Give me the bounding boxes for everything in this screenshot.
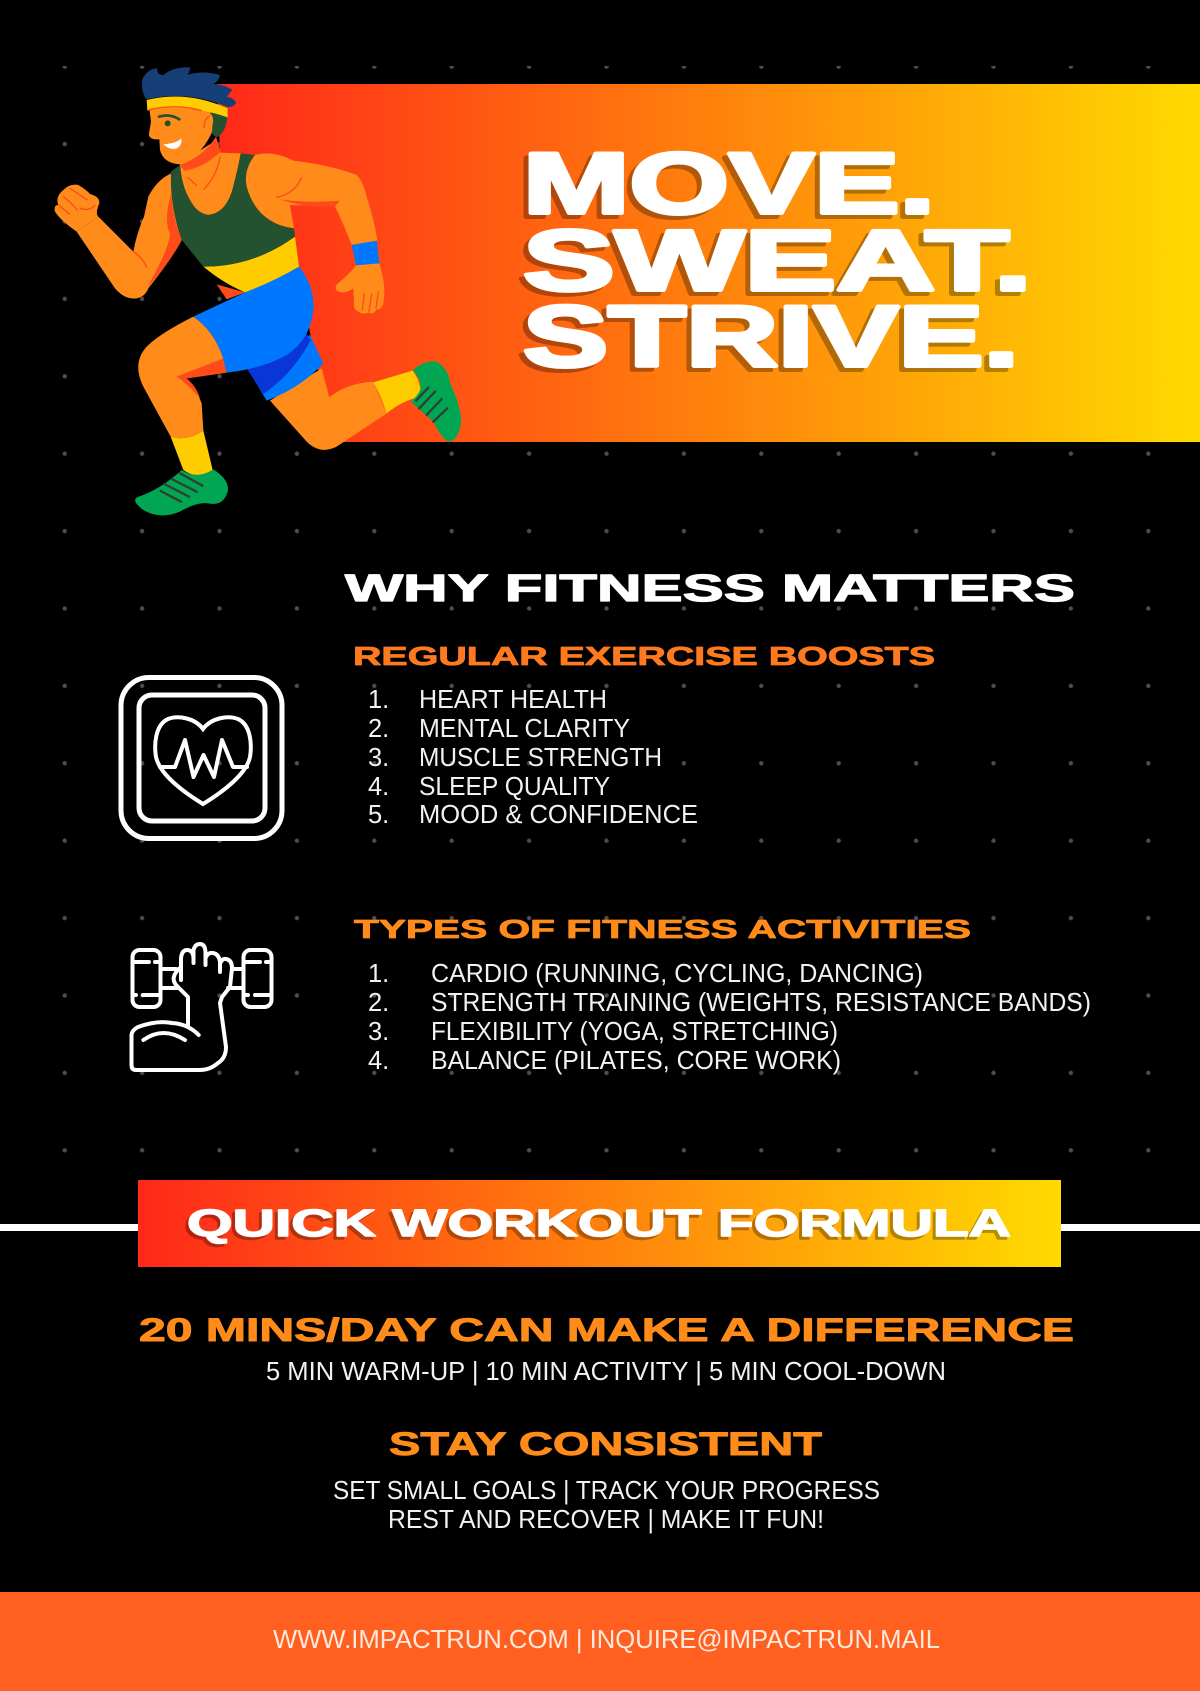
fist: [55, 185, 99, 232]
list: exercise benefits: HEART HEALTH: [419, 686, 607, 714]
list: exercise benefits: 2.: [368, 715, 389, 743]
hero gradient banner: [217, 84, 1200, 442]
list: exercise benefits: SLEEP QUALITY: [419, 773, 610, 801]
headband: [147, 96, 228, 117]
banner: quick workout formula: QUICK WORKOUT FORMULA: [187, 1203, 1011, 1245]
front shoe: [135, 469, 228, 515]
icon: hand with dumbbell: [132, 944, 272, 1070]
list: activity types: 3.: [368, 1018, 389, 1046]
list: activity types: FLEXIBILITY (YOGA, STRETCHING): [431, 1018, 838, 1046]
list: activity types: 2.: [368, 989, 389, 1017]
list: exercise benefits: 1.: [368, 686, 389, 714]
title: move sweat strive: SWEAT.: [523, 213, 1032, 309]
text: consistency tips: REST AND RECOVER | MAKE IT FUN!: [388, 1506, 824, 1534]
tank top: [171, 153, 295, 267]
list: exercise benefits: 3.: [368, 744, 389, 772]
front sock: [171, 431, 213, 475]
list: activity types: BALANCE (PILATES, CORE WORK): [431, 1047, 841, 1075]
title: move sweat strive: MOVE.: [523, 136, 935, 232]
list: exercise benefits: [368, 686, 698, 829]
open hand: [336, 263, 384, 314]
heading: stay consistent: STAY CONSISTENT: [389, 1426, 823, 1462]
wristband: [352, 241, 379, 265]
list: exercise benefits: MOOD & CONFIDENCE: [419, 801, 698, 829]
heading: why fitness matters: WHY FITNESS MATTERS: [345, 568, 1075, 610]
text: consistency tips: SET SMALL GOALS | TRACK YOUR PROGRESS: [333, 1477, 880, 1505]
text: consistency tips: [333, 1477, 880, 1534]
title: move sweat strive: [523, 136, 1032, 385]
face: [149, 103, 215, 164]
heading: 20 mins a day: 20 MINS/DAY CAN MAKE A DIFFERENCE: [139, 1312, 1074, 1348]
subheading: types of fitness activities: TYPES OF FITNESS ACTIVITIES: [354, 914, 971, 944]
waist shadow: [217, 284, 245, 299]
banner: quick workout formula: [138, 1180, 1061, 1267]
title: move sweat strive: STRIVE.: [523, 289, 1019, 385]
list: exercise benefits: 5.: [368, 801, 389, 829]
front arm: [77, 173, 182, 299]
shorts rear leg: [247, 333, 323, 401]
list: exercise benefits: MUSCLE STRENGTH: [419, 744, 662, 772]
illustration: running man: [55, 67, 461, 515]
front leg: [138, 317, 227, 438]
list: activity types: 1.: [368, 960, 389, 988]
list: exercise benefits: 4.: [368, 773, 389, 801]
neck shadow: [180, 137, 221, 171]
rear shoe: [411, 361, 461, 442]
hair: [142, 67, 236, 107]
chest: [180, 140, 241, 215]
list: activity types: CARDIO (RUNNING, CYCLING, DANCING): [431, 960, 923, 988]
list: activity types: [368, 960, 1091, 1075]
list: activity types: STRENGTH TRAINING (WEIGHTS, RESISTANCE BANDS): [431, 989, 1091, 1017]
list: exercise benefits: MENTAL CLARITY: [419, 715, 630, 743]
back of head: [200, 103, 228, 137]
shorts: [193, 267, 313, 373]
rear leg: [270, 368, 387, 450]
footer bar: [0, 1592, 1200, 1691]
waistband: [203, 237, 299, 292]
rear arm: [188, 153, 377, 245]
list: activity types: 4.: [368, 1047, 389, 1075]
icon: heart monitor: [121, 678, 282, 838]
subheading: regular exercise boosts: REGULAR EXERCISE BOOSTS: [353, 641, 935, 671]
rear sock: [373, 371, 421, 413]
footer bar: WWW.IMPACTRUN.COM | INQUIRE@IMPACTRUN.MAIL: [273, 1626, 940, 1654]
text: workout breakdown: 5 MIN WARM-UP | 10 MIN ACTIVITY | 5 MIN COOL-DOWN: [266, 1358, 946, 1386]
